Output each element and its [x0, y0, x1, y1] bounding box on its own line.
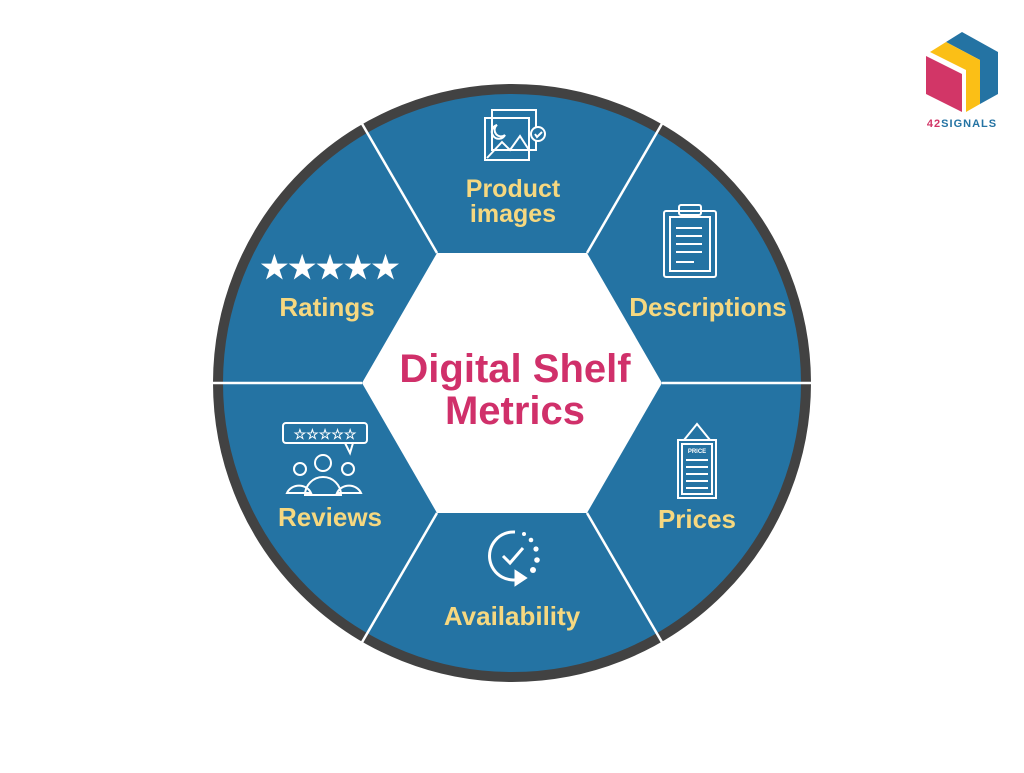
icon: reviews: ☆☆☆☆☆ — [294, 426, 357, 442]
label: product images: images — [470, 200, 556, 228]
icon: price tag: PRICE — [688, 449, 706, 455]
logo — [926, 32, 998, 130]
icon: price tag — [678, 424, 716, 498]
icon: clipboard — [664, 205, 716, 277]
icon: stars: ★★★★★ — [261, 250, 400, 285]
label: product images: Product — [466, 175, 560, 203]
title: Metrics — [445, 389, 585, 433]
label: descriptions: Descriptions — [629, 292, 787, 322]
label: prices: Prices — [658, 504, 736, 534]
label: availability: Availability — [444, 601, 581, 631]
logo: 42SIGNALS — [927, 118, 997, 130]
icon: reviews — [283, 423, 367, 495]
wheel — [210, 89, 814, 677]
icon: availability — [490, 532, 540, 584]
title: Digital Shelf — [399, 347, 631, 391]
label: reviews: Reviews — [278, 502, 382, 532]
icon: product images — [485, 110, 545, 160]
label: ratings: Ratings — [279, 292, 375, 322]
